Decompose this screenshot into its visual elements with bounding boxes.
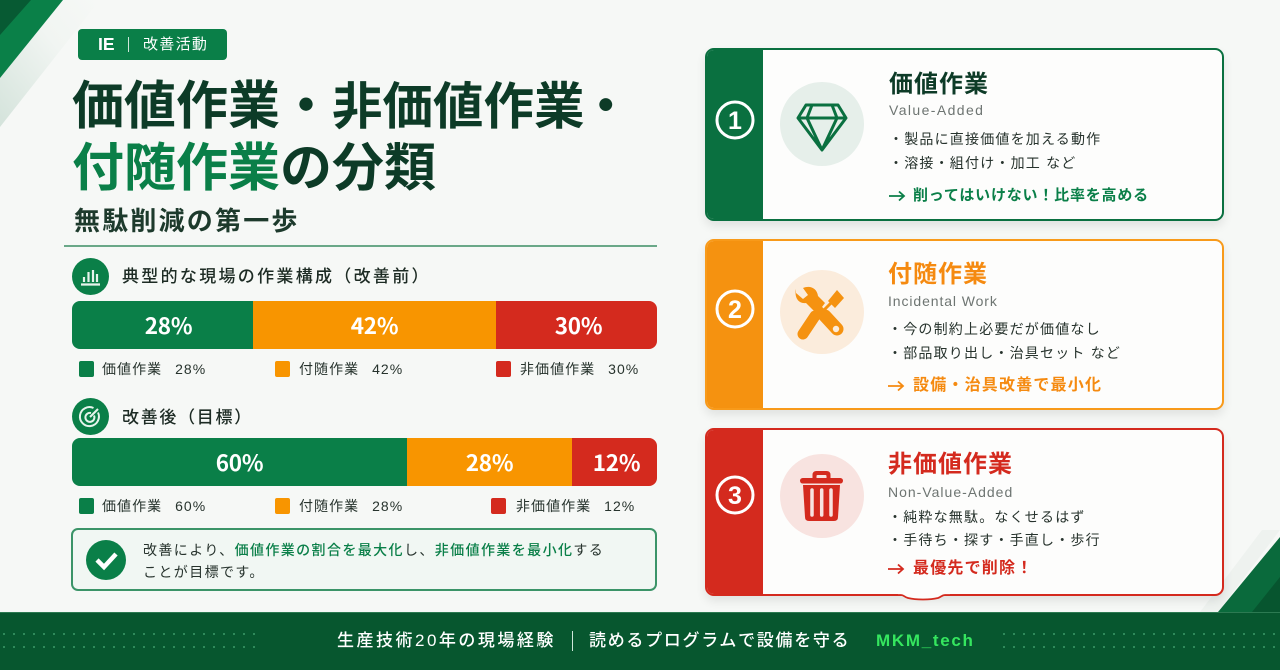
- icon: target: [72, 398, 109, 435]
- english label: Non-Value-Added: [888, 484, 1013, 500]
- panel: 付随作業: [705, 239, 1224, 410]
- legend: before: [79, 361, 639, 377]
- dot pattern left: [3, 633, 255, 648]
- action: 削ってはいけない！比率を高める: [913, 187, 1149, 204]
- section heading: before: 典型的な現場の作業構成（改善前）: [122, 267, 431, 286]
- panel: 価値作業: [705, 48, 1224, 221]
- number 3: 3: [728, 482, 742, 510]
- bullets: [888, 321, 1121, 361]
- section heading: after: 改善後（目標）: [122, 408, 253, 427]
- dot pattern right: [1003, 633, 1275, 648]
- footer slogan: 読めるプログラムで設備を守る: [589, 631, 850, 650]
- number 1: [716, 100, 754, 140]
- icon: tools: [780, 270, 864, 354]
- title: 価値作業・: [72, 78, 332, 136]
- legend: after: [79, 498, 635, 514]
- section heading: after: [72, 398, 253, 435]
- legend: before: 付随作業 42%: [299, 361, 403, 377]
- heading: 非価値作業: [888, 451, 1013, 478]
- stacked bar: before: 42%: [351, 309, 398, 341]
- stacked bar: after: 60%: [216, 446, 263, 478]
- bullets: ・手待ち・探す・手直し・歩行: [888, 532, 1101, 548]
- legend: after: 非価値作業 12%: [516, 498, 635, 514]
- bullets: ・製品に直接価値を加える動作: [889, 131, 1101, 147]
- stacked bar: after: 28%: [466, 446, 513, 478]
- stacked bar: after: 12%: [593, 446, 640, 478]
- icon: check: [86, 540, 126, 580]
- heading: 付随作業: [888, 261, 988, 288]
- footer band: [0, 612, 1280, 670]
- callout text: [143, 542, 604, 580]
- callout: goal: [71, 528, 657, 591]
- icon: diamond: [780, 82, 864, 166]
- section heading: before: [72, 258, 431, 295]
- callout text: ことが目標です。: [143, 564, 265, 580]
- arrow: [889, 190, 906, 202]
- bullets: ・今の制約上必要だが価値なし: [888, 321, 1101, 337]
- bullets: ・溶接・組付け・加工 など: [889, 155, 1076, 171]
- heading: 価値作業: [889, 71, 989, 98]
- number 3: [716, 476, 754, 514]
- number 2: 2: [728, 296, 742, 324]
- panel: 非価値作業: [705, 428, 1224, 596]
- number 2: [716, 290, 754, 328]
- callout text: 改善により、価値作業の割合を最大化し、非価値作業を最小化する: [143, 542, 604, 558]
- title: 付随作業の分類: [72, 140, 436, 198]
- stacked bar: before: 30%: [555, 309, 602, 341]
- stacked bar: before: 28%: [145, 309, 192, 341]
- divider: [64, 245, 657, 247]
- action: 最優先で削除！: [913, 560, 1033, 577]
- bullets: ・純粋な無駄。なくせるはず: [888, 509, 1086, 525]
- legend: after: 付随作業 28%: [299, 498, 403, 514]
- number 1: 1: [728, 107, 742, 135]
- badge: IE 改善活動: [78, 29, 227, 60]
- bullets: ・部品取り出し・治具セット など: [888, 345, 1121, 361]
- title: [72, 78, 631, 198]
- bullets: [889, 131, 1101, 171]
- arrow: [888, 564, 904, 574]
- title: 非価値作業・: [332, 78, 631, 135]
- badge: IE 改善活動: 改善活動: [143, 36, 208, 53]
- english label: Value-Added: [889, 102, 984, 118]
- english label: Incidental Work: [888, 293, 998, 309]
- legend: after: 価値作業 60%: [102, 498, 206, 514]
- card bump: [898, 594, 950, 600]
- subtitle: 無駄削減の第一歩: [74, 206, 300, 236]
- action: 設備・治具改善で最小化: [913, 377, 1102, 394]
- icon: trash can: [780, 454, 864, 538]
- icon: bar chart: [72, 258, 109, 295]
- arrow: [888, 380, 904, 392]
- footer divider: [572, 631, 573, 651]
- badge: IE 改善活動: IE: [98, 34, 115, 54]
- stacked bar: after: [72, 438, 657, 486]
- bullets: [888, 509, 1101, 548]
- brand: MKM_tech: [876, 631, 975, 650]
- legend: before: 非価値作業 30%: [520, 361, 639, 377]
- stacked bar: before: [72, 301, 657, 349]
- footer text: 生産技術20年の現場経験: [337, 631, 556, 650]
- legend: before: 価値作業 28%: [102, 361, 206, 377]
